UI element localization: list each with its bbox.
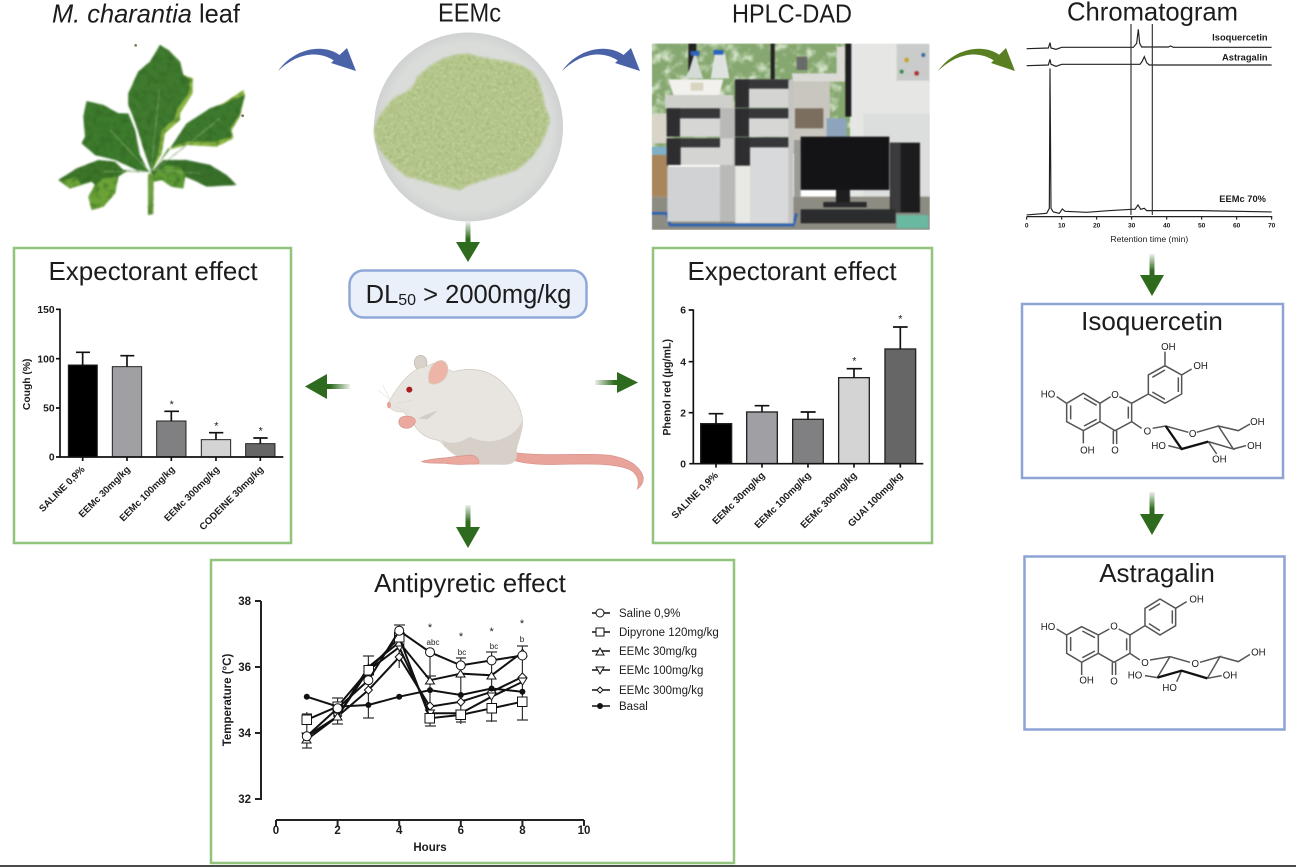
axis labels: 2	[334, 825, 341, 837]
series: EEMc 100	[302, 644, 527, 740]
bar chart: phenol red: *	[898, 313, 902, 325]
axis tick labels	[1025, 222, 1276, 229]
panel: expectorant effect (phenol red)	[653, 248, 932, 543]
bar chart: cough: 0	[49, 453, 55, 464]
molecule: astragalin: HO	[1041, 622, 1056, 633]
retention window lines	[1131, 24, 1152, 215]
bar chart: phenol red: EEMc 300mg/kg	[799, 470, 859, 531]
bar chart: phenol red: 2	[680, 408, 686, 419]
significance marks	[427, 618, 525, 657]
line chart: temperature	[222, 596, 590, 854]
axis title: Retention time (min)	[1110, 234, 1188, 244]
trace labels	[1212, 32, 1268, 204]
legend: Dipyrone 120mg/kg	[619, 627, 719, 639]
molecule: isoquercetin: OH	[1080, 445, 1095, 456]
molecule: astragalin: O	[1192, 659, 1200, 670]
series: Saline	[302, 626, 527, 741]
bar chart: phenol red: EEMc 30mg/kg	[711, 470, 767, 527]
significance marks: bc	[458, 648, 466, 657]
bar chart: cough: EEMc 300mg/kg	[162, 464, 222, 524]
legend: EEMc 100mg/kg	[619, 665, 703, 677]
significance marks: b	[520, 635, 525, 644]
molecule: astragalin: OH	[1079, 675, 1094, 686]
axis tick labels: 20	[1093, 222, 1101, 229]
heading: Expectorant effect	[687, 256, 897, 286]
bar chart: cough: EEMc 30mg/kg	[77, 464, 133, 520]
axis labels: Hours	[413, 842, 447, 854]
far ear	[414, 355, 427, 370]
arrow: EEMc to HPLC	[562, 48, 640, 71]
label: DL50: 50	[398, 292, 416, 309]
molecule: isoquercetin: O	[1189, 429, 1197, 440]
axis tick labels: 10	[1058, 222, 1066, 229]
heading: Antipyretic effect	[374, 568, 567, 598]
tail	[515, 453, 643, 489]
arrow: down from mouse	[456, 505, 480, 548]
trace: astragalin	[1027, 57, 1272, 66]
axis tick labels: 60	[1233, 222, 1241, 229]
bar chart: cough: *	[214, 421, 218, 433]
bar chart: phenol red: EEMc 100mg/kg	[753, 470, 813, 531]
significance marks: bc	[490, 642, 498, 651]
label: DL50	[350, 270, 586, 318]
chart: chromatogram	[1025, 24, 1276, 244]
axis labels: 8	[519, 825, 526, 837]
axis labels: 32	[238, 794, 251, 806]
trace: EEMc 70%	[1027, 68, 1272, 215]
trace labels: Isoquercetin	[1212, 32, 1268, 42]
illustration: mouse	[378, 355, 643, 489]
near ear	[429, 361, 448, 384]
molecule: astragalin: HO	[1162, 683, 1177, 694]
molecule: astragalin: OH	[1251, 648, 1266, 659]
body	[388, 363, 522, 464]
bar chart: cough: SALINE 0,9%	[37, 464, 88, 515]
molecule: astragalin: OH	[1189, 595, 1204, 606]
image: leaf	[58, 44, 245, 215]
molecule: isoquercetin: OH	[1247, 441, 1262, 452]
legend	[592, 608, 719, 713]
molecule: astragalin: HO	[1128, 670, 1143, 681]
axis labels: 36	[238, 662, 251, 674]
axis labels: 0	[273, 825, 279, 837]
axis tick labels: 50	[1198, 222, 1206, 229]
bar chart: cough: *	[259, 426, 263, 438]
significance marks: *	[489, 626, 494, 638]
bar chart: cough: 50	[43, 404, 55, 415]
panel: antipyretic effect	[211, 560, 734, 863]
legend: EEMc 30mg/kg	[619, 646, 697, 658]
axes	[255, 601, 584, 826]
bar chart: cough: CODEINE 30mg/kg	[198, 464, 266, 533]
axis labels	[222, 596, 590, 854]
heading: Isoquercetin	[1081, 306, 1223, 336]
panel: expectorant effect (cough)	[14, 248, 291, 543]
axis labels: 10	[578, 825, 590, 837]
hind foot	[422, 455, 479, 464]
molecule: isoquercetin	[1041, 342, 1265, 466]
bar chart: phenol red	[662, 306, 923, 531]
heading: Expectorant effect	[48, 256, 258, 286]
bar chart: phenol red: 0	[680, 459, 686, 470]
legend: Saline 0,9%	[619, 608, 680, 620]
bar chart: phenol red: 6	[680, 306, 686, 317]
molecule: isoquercetin: OH	[1193, 361, 1208, 372]
eye	[406, 387, 412, 393]
bar chart: phenol red: GUAI 100mg/kg	[846, 470, 905, 529]
series: Dipyrone	[302, 632, 527, 724]
bar chart: phenol red: SALINE 0,9%	[670, 470, 721, 521]
body shadow	[442, 422, 522, 464]
molecule: isoquercetin: OH	[1212, 455, 1227, 466]
panel: isoquercetin	[1022, 304, 1283, 478]
axis labels: 34	[238, 728, 252, 740]
axis labels: 4	[396, 825, 403, 837]
bar chart: cough: Cough (%)	[22, 359, 33, 410]
arrow: leaf to EEMc	[278, 48, 356, 71]
molecule: astragalin: O	[1110, 622, 1118, 633]
molecule: isoquercetin: HO	[1151, 441, 1166, 452]
error bars	[302, 625, 528, 748]
molecule: isoquercetin: OH	[1161, 342, 1176, 353]
molecule: astragalin	[1041, 595, 1266, 694]
x axis	[1027, 217, 1272, 220]
axis tick labels: 40	[1163, 222, 1171, 229]
image: EEMc powder	[374, 32, 563, 222]
molecule: astragalin: O	[1141, 658, 1149, 669]
nose and whiskers	[378, 385, 413, 412]
bar chart: phenol red: *	[852, 356, 856, 368]
legend: EEMc 300mg/kg	[619, 685, 703, 697]
significance marks: *	[459, 631, 464, 643]
molecule: isoquercetin: OH	[1250, 417, 1265, 428]
arrow: left to cough chart	[305, 374, 350, 399]
significance marks: *	[520, 618, 525, 630]
series: EEMc 30	[302, 639, 527, 743]
arrow: chromatogram to isoquercetin	[1140, 254, 1164, 296]
trace labels: Astragalin	[1222, 52, 1268, 62]
legend: Basal	[619, 701, 648, 713]
arrow: HPLC to chromatogram	[938, 48, 1015, 71]
bar chart: cough	[22, 305, 283, 533]
bar chart: cough: EEMc 100mg/kg	[118, 464, 178, 524]
bar chart: cough: *	[170, 399, 174, 411]
arrow: isoquercetin to astragalin	[1140, 492, 1164, 535]
molecule: astragalin: OH	[1223, 670, 1237, 681]
molecule: isoquercetin: O	[1111, 445, 1119, 456]
bottom edge rule	[0, 865, 1296, 867]
bar chart: phenol red: Phenol red (µg/mL)	[662, 339, 674, 436]
series: EEMc 300	[303, 653, 526, 740]
molecule: isoquercetin: HO	[1041, 389, 1056, 400]
neck shadow	[418, 411, 438, 419]
significance marks: *	[428, 622, 433, 634]
label: DL50: DL	[366, 281, 398, 309]
axis tick labels: 0	[1025, 222, 1029, 229]
significance marks: abc	[427, 638, 439, 647]
arrow: right to phenol red chart	[595, 372, 638, 393]
heading: Astragalin	[1099, 558, 1215, 588]
axis tick labels: 30	[1128, 222, 1136, 229]
axis labels: 38	[238, 596, 252, 608]
axis labels: Temperature (°C)	[222, 654, 234, 746]
panel: astragalin	[1024, 556, 1284, 730]
arrow: down from EEMc	[456, 222, 480, 262]
trace: isoquercetin	[1027, 29, 1272, 49]
label: DL50: > 2000mg/kg	[416, 281, 571, 309]
image: HPLC-DAD instrument photo	[652, 43, 930, 230]
bar chart: cough: 150	[37, 305, 55, 316]
molecule: astragalin: O	[1110, 676, 1118, 687]
axis labels: 6	[458, 825, 464, 837]
front paw	[399, 416, 415, 428]
molecule: isoquercetin: O	[1111, 390, 1119, 401]
bar chart: phenol red: 4	[680, 357, 686, 368]
axis tick labels: 70	[1268, 222, 1276, 229]
molecule: isoquercetin: O	[1144, 426, 1152, 437]
series: Basal	[304, 686, 525, 710]
bar chart: cough: 100	[37, 354, 55, 365]
trace labels: EEMc 70%	[1219, 194, 1267, 204]
